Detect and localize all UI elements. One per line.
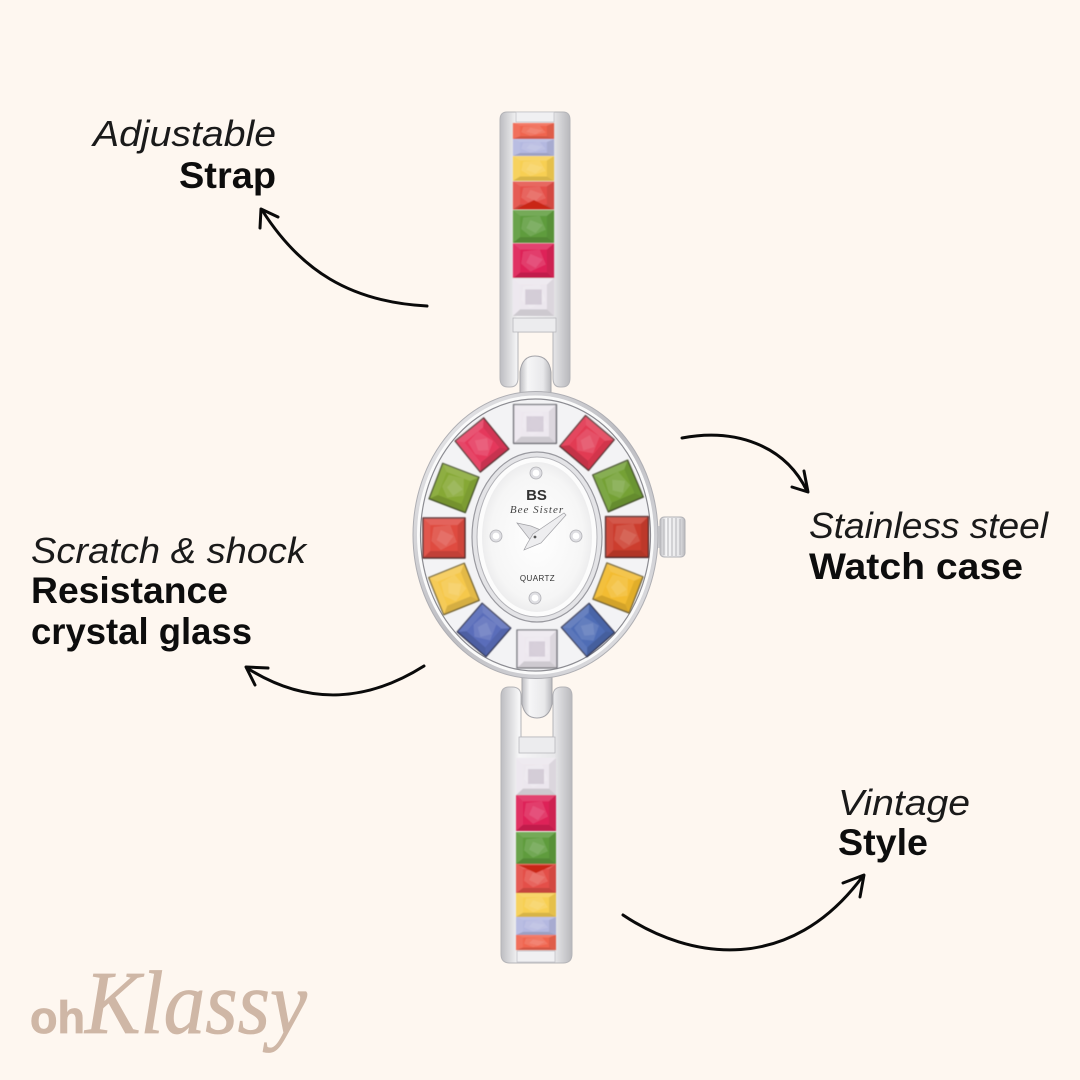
upper lug xyxy=(520,356,551,395)
label: vintage style: Vintage xyxy=(838,782,970,823)
arrow: to watch case xyxy=(682,435,808,492)
label: adjustable strap xyxy=(91,113,276,196)
upper strap gems xyxy=(513,123,554,316)
label: vintage style: Style xyxy=(838,822,928,863)
arrow: to adjustable strap xyxy=(260,209,427,306)
arrow: to crystal glass xyxy=(246,666,424,695)
watch case xyxy=(413,392,658,678)
watch xyxy=(413,112,685,963)
arrow: to vintage style xyxy=(623,875,864,950)
label: scratch and shock resistance crystal glass: Resistance xyxy=(31,570,228,611)
dial stones xyxy=(490,467,582,604)
upper strap xyxy=(500,112,570,387)
label: scratch and shock resistance crystal glass xyxy=(31,530,308,652)
brand mark: BS xyxy=(526,487,547,504)
watch hands xyxy=(517,513,566,550)
label: scratch and shock resistance crystal glass: Scratch & shock xyxy=(31,530,308,571)
brand name: Bee Sister xyxy=(510,504,564,516)
quartz label: QUARTZ xyxy=(520,574,555,583)
logo: Klassy xyxy=(83,954,307,1053)
label: stainless steel watch case: Stainless steel xyxy=(809,505,1049,546)
label: adjustable strap: Adjustable xyxy=(91,113,276,154)
label: stainless steel watch case: Watch case xyxy=(809,546,1023,587)
dial xyxy=(472,452,602,622)
label: scratch and shock resistance crystal glass: crystal glass xyxy=(31,611,252,652)
label: adjustable strap: Strap xyxy=(179,155,276,196)
label: vintage style xyxy=(838,782,970,863)
lower lug xyxy=(522,675,552,718)
logo: oh xyxy=(30,992,85,1043)
case gems xyxy=(423,405,648,668)
lower strap xyxy=(501,687,572,963)
lower strap gems xyxy=(516,758,556,950)
crown xyxy=(655,517,685,557)
label: stainless steel watch case xyxy=(809,505,1049,587)
